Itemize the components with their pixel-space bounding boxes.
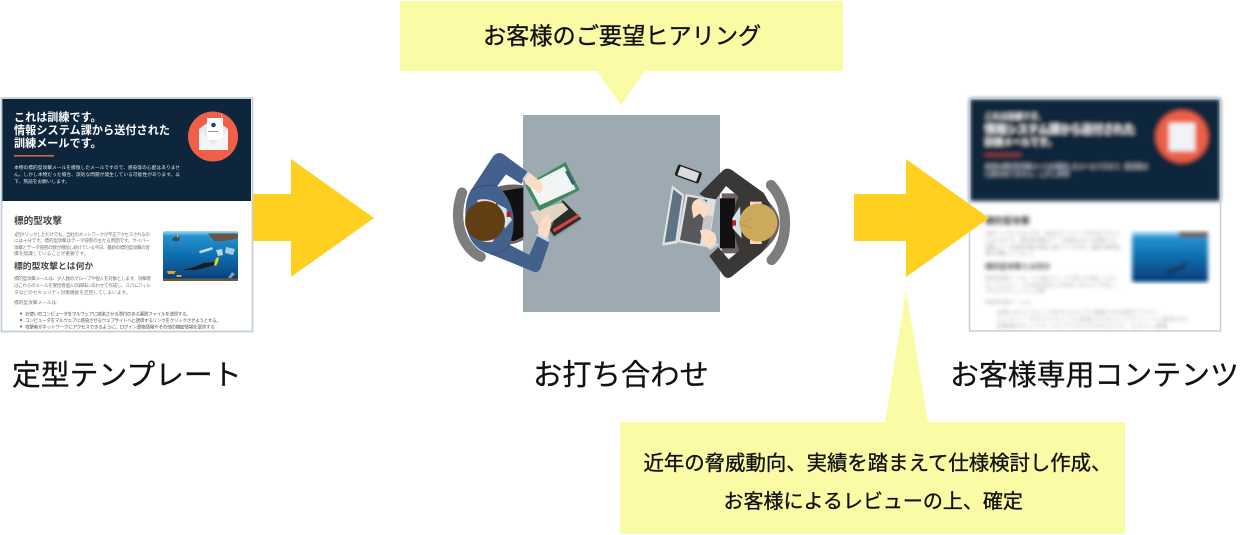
template article text: 標的型攻撃とは何か bbox=[14, 260, 93, 271]
template article text: には十分です。標的型攻撃はデータ侵害の主たる原因です。サイバー bbox=[14, 237, 150, 244]
arrow: template to meeting bbox=[253, 159, 374, 277]
template article text: お使いのコンピュータをマルウェアに感染させる添付のある悪質ファイルを送信する。 bbox=[25, 310, 191, 318]
callout: threat trends and review: 近年の脅威動向、実績を踏まえて仕様検討し作成、 bbox=[644, 452, 1111, 475]
blurred article: 標的型攻撃メールは: bbox=[985, 299, 1031, 306]
chair bbox=[771, 185, 785, 260]
template header banner: ん。しかし本物だった場合、深刻な問題が発生している可能性があります。以 bbox=[14, 171, 180, 178]
paper bbox=[530, 203, 568, 231]
label: meeting: お打ち合わせ bbox=[533, 359, 709, 392]
blurred banner: これは訓練です。 bbox=[985, 111, 1044, 121]
panel: customer-specific content page (blurred) bbox=[969, 98, 1221, 332]
shirt and tie bbox=[497, 204, 512, 228]
template header banner: 下、熟読をお願いします。 bbox=[14, 178, 70, 185]
panel: meeting table bbox=[523, 115, 720, 312]
jacket bbox=[699, 169, 773, 278]
blurred banner bbox=[970, 99, 1220, 201]
chair bbox=[458, 193, 481, 257]
template diver illustration bbox=[163, 231, 238, 281]
template header banner: 情報システム課から送付された bbox=[14, 123, 170, 137]
notebook bbox=[547, 202, 581, 237]
phone bbox=[674, 164, 702, 184]
label: customer-specific content: お客様専用コンテンツ bbox=[950, 360, 1239, 392]
blurred article: 慣を認識していること bbox=[985, 250, 1035, 257]
blurred article: 標的型攻撃 bbox=[985, 215, 1030, 226]
hair bbox=[477, 199, 496, 242]
template article text: 標的型攻撃メールは、少人数のグループや個人を対象とします。攻撃者 bbox=[14, 275, 151, 282]
blurred banner: 本物の標的型攻撃メールを模倣したメールですので、感染等の bbox=[985, 163, 1148, 171]
blurred banner: 心配はありません。しかし本物 bbox=[985, 170, 1069, 178]
blurred article: 標的型攻撃とは何か bbox=[985, 261, 1052, 271]
blurred article: 標的型攻撃メールは、少人数のグループや個人を対象とします。 bbox=[985, 275, 1120, 282]
desk seat bbox=[722, 193, 779, 253]
blurred banner: 情報システム課から送付された bbox=[985, 122, 1135, 136]
hands bbox=[524, 172, 543, 193]
jacket bbox=[465, 153, 549, 272]
template article text: 攻撃とデータ侵害の数が増加し続けている今日、最新の標的型攻撃の習 bbox=[14, 244, 150, 251]
template article text: 標的型攻撃 bbox=[14, 215, 62, 227]
callout: threat trends and review: お客様によるレビューの上、確定 bbox=[724, 490, 1023, 513]
template header banner bbox=[2, 99, 251, 201]
blurred article: はこれらのメールを受信者個人の興味にあわせて作成し、 bbox=[985, 282, 1120, 289]
panel: standard template page bbox=[1, 98, 253, 332]
blurred diver illustration bbox=[1132, 232, 1208, 282]
template header banner: 訓練メールです。 bbox=[14, 136, 102, 150]
callout: threat trends and review bbox=[620, 290, 1125, 534]
shirt and tie bbox=[732, 207, 742, 238]
blurred banner: 訓練メールです。 bbox=[985, 136, 1056, 147]
icon: left person, top-down view bbox=[458, 153, 581, 272]
template article text: コンピュータをマルウェアに感染させるウェブサイトへと誘導するリンクをクリックさせようとする。 bbox=[25, 317, 221, 324]
blurred article: コンピュータをマルウェアに感染させるウェブサイトへと誘導する bbox=[997, 316, 1187, 323]
blurred article: には十分です。標的型攻撃はデータ侵害の主たる原因です。 bbox=[985, 237, 1120, 244]
blurred article: お使いのコンピュータをマルウェアに感染させる添付ファイル bbox=[997, 309, 1157, 316]
callout: customer hearing: お客様のご要望ヒアリング bbox=[483, 23, 761, 49]
template header banner: これは訓練です。 bbox=[14, 110, 102, 124]
arrow: meeting to custom content bbox=[854, 159, 989, 277]
clipboard bbox=[525, 162, 580, 211]
callout: customer hearing bbox=[400, 1, 843, 105]
template article text: 攻撃者がネットワークにアクセスできるように、ログイン資格情報やその他の機密情報を要求する bbox=[25, 324, 215, 330]
template article text: 1回クリックしただけでも、当社のネットワークが不正アクセスされるの bbox=[14, 231, 150, 238]
blurred article: 1回クリックしただけでも、当社のネットワークが不正アクセス bbox=[985, 230, 1120, 237]
template article text: 標的型攻撃メールは: bbox=[14, 299, 58, 306]
template page border bbox=[2, 98, 252, 332]
blurred article bbox=[985, 215, 1187, 330]
blurred article: 攻撃者がネットワークにアクセスできるように、ログイン資格 bbox=[997, 323, 1167, 330]
blurred article: 攻撃とデータ侵害の数が増加し続けている今日、最新の標的型 bbox=[985, 244, 1120, 251]
hands bbox=[692, 199, 709, 218]
label: standard template: 定型テンプレート bbox=[12, 360, 242, 392]
template article text: タなどのセキュリティ対策機能を迂回してしまいます。 bbox=[14, 289, 130, 296]
desk seat bbox=[490, 184, 523, 247]
hair bbox=[750, 202, 762, 244]
template header banner: 本物の標的型攻撃メールを模倣したメールですので、感染等の心配はありませ bbox=[14, 164, 180, 171]
icon: right person, top-down view bbox=[662, 164, 785, 278]
template article text: 慣を認識していることが重要です。 bbox=[14, 250, 88, 257]
laptop bbox=[662, 185, 684, 246]
template article text: はこれらのメールを受信者個人の興味にあわせて作成し、スパムフィル bbox=[14, 282, 151, 289]
blurred article: タなどのセキュリティ対策 bbox=[985, 288, 1045, 295]
template article text bbox=[14, 215, 221, 330]
blurred page border bbox=[970, 98, 1220, 331]
